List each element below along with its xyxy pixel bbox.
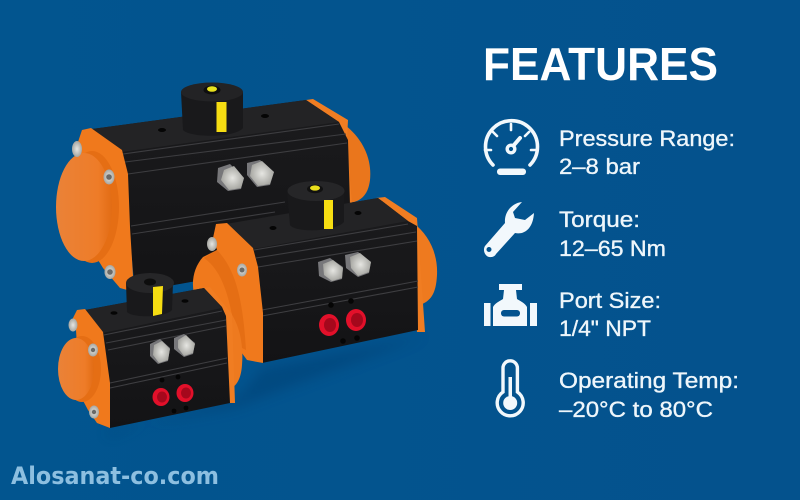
feature: pressure range [485, 121, 735, 179]
right end cap [225, 305, 242, 388]
body grooves [104, 311, 227, 388]
value: port size: 1/4" NPT [559, 316, 651, 341]
body top [92, 100, 339, 152]
title: FEATURES [483, 38, 718, 90]
left cap [56, 153, 112, 261]
mounting holes [158, 128, 166, 132]
position indicator knob [181, 92, 243, 136]
text: pressure range: Pressure Range: [559, 126, 735, 151]
body [85, 288, 230, 428]
steel fittings [318, 252, 371, 282]
position indicator knob [126, 283, 173, 316]
value: operating temp: –20°C to 80°C [559, 397, 713, 422]
body grooves [254, 224, 418, 316]
large actuator [56, 82, 370, 292]
text: port size: Port Size: [559, 288, 661, 313]
mounting holes [110, 311, 118, 315]
feature: operating temperature [497, 361, 739, 422]
small actuator [58, 273, 242, 428]
cap shade [204, 250, 246, 350]
cap flange [63, 336, 101, 402]
feature: port size [484, 284, 661, 341]
bolts [72, 141, 82, 157]
steel fittings [150, 334, 195, 364]
position indicator knob [287, 192, 344, 230]
medium actuator [193, 181, 437, 363]
icon: thermometer [497, 361, 523, 416]
body top [85, 288, 222, 333]
body grooves [123, 124, 347, 234]
icon: wrench [484, 202, 534, 257]
cap flange [65, 151, 119, 263]
port holes [160, 375, 188, 413]
watermark: Alosanat-co.com [11, 462, 219, 490]
right plate [203, 287, 235, 403]
body [92, 100, 355, 292]
icon: valve [484, 284, 537, 326]
value: pressure range: 2–8 bar [559, 154, 640, 179]
mounting holes [270, 226, 276, 230]
icon: pressure gauge [485, 121, 538, 174]
steel fittings [217, 160, 274, 191]
right plate [376, 197, 425, 332]
value: torque: 12–65 Nm [559, 236, 666, 261]
bolts [207, 237, 217, 251]
right plate [306, 99, 352, 205]
port holes [328, 298, 360, 344]
left cap [58, 338, 94, 400]
body top [226, 198, 408, 249]
red ports [152, 384, 194, 406]
right end cap [412, 222, 437, 305]
text: torque: Torque: [559, 207, 640, 232]
body [226, 198, 418, 363]
left plate [72, 309, 110, 428]
actuator shadows [105, 336, 425, 436]
left plate [76, 128, 134, 292]
red ports [319, 309, 366, 336]
feature: torque [484, 202, 666, 261]
left plate and cap [193, 223, 263, 363]
bolts [68, 318, 78, 332]
text: operating temp: Operating Temp: [559, 368, 739, 393]
right end cap [345, 125, 370, 203]
